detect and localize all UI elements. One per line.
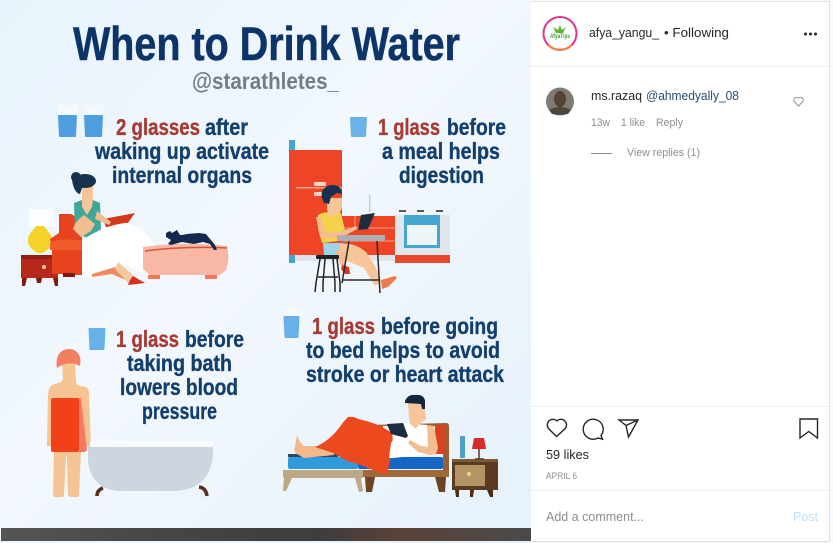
likes count: 59 likes [546,447,589,462]
comment: 1 like [621,117,645,129]
follow status: • Following [664,25,729,40]
text: stroke or heart attack: stroke or heart attack [306,361,504,387]
text: internal organs: internal organs [112,162,252,188]
illustration: woman on chaise with cat [21,172,228,286]
icon: comment [583,419,603,439]
text: 1 glass before: 1 glass [116,326,179,352]
view replies: View replies (1) [627,147,700,159]
text: pressure: pressure [142,398,217,424]
panel: infographic [0,0,531,543]
post button: Post [793,509,818,524]
icon: profile avatar: AfyaTips [550,34,571,40]
text: 1 glass before going: before going [381,313,498,339]
comment text: ms.razaq [591,89,642,103]
text: to bed helps to avoid: to bed helps to avoid [306,337,500,363]
panel: post sidebar [531,1,830,542]
section: one glass before a meal [289,109,506,293]
icon: glass [348,109,369,136]
text: 1 glass before: before [185,326,244,352]
icon: heart [547,419,567,436]
icon: commenter avatar [546,88,574,116]
comment: Reply [656,117,683,129]
section: two glasses after waking [21,105,269,286]
text: taking bath: taking bath [127,350,232,376]
text: 1 glass before: before [447,114,506,140]
post header [544,17,817,50]
icon: glass [282,309,302,337]
icon: more options [804,32,817,36]
post date: APRIL 6 [546,471,577,482]
text: 2 glasses after: after [205,114,248,140]
section: one glass before bath [47,320,244,497]
icon: share [619,420,638,437]
illustration: woman at kitchen table [289,140,450,293]
icon: profile avatar [544,17,576,50]
text: lowers blood: lowers blood [120,374,238,400]
handle: @starathletes_ [192,68,339,94]
illustration: man reading in bed [283,395,465,492]
username: afya_yangu_ [589,25,660,40]
text: 1 glass before: 1 glass [378,114,440,140]
comment meta: 13w [591,117,610,129]
section: one glass before bed [282,309,504,497]
text: 1 glass before going: 1 glass [312,313,375,339]
action icons [547,419,818,439]
illustration: woman in towel [47,349,91,497]
comment: @ahmedyally_08 [646,89,739,103]
icon: comment like heart [794,97,803,106]
dark strip at bottom of image [1,528,531,541]
illustration: nightstand with lamp [452,438,498,497]
comment input placeholder: Add a comment... [546,509,644,524]
text: waking up activate: waking up activate [94,138,269,164]
illustration: bathtub [88,441,213,496]
comment [546,88,803,159]
icon: bookmark [800,419,818,438]
title: When to Drink Water [73,17,460,70]
text: a meal helps: a meal helps [382,138,500,164]
icon: glass [87,320,107,349]
icon: two glasses [57,105,104,136]
text: 2 glasses after: 2 glasses [116,114,200,140]
view replies [591,147,700,159]
text: digestion: digestion [399,162,484,188]
